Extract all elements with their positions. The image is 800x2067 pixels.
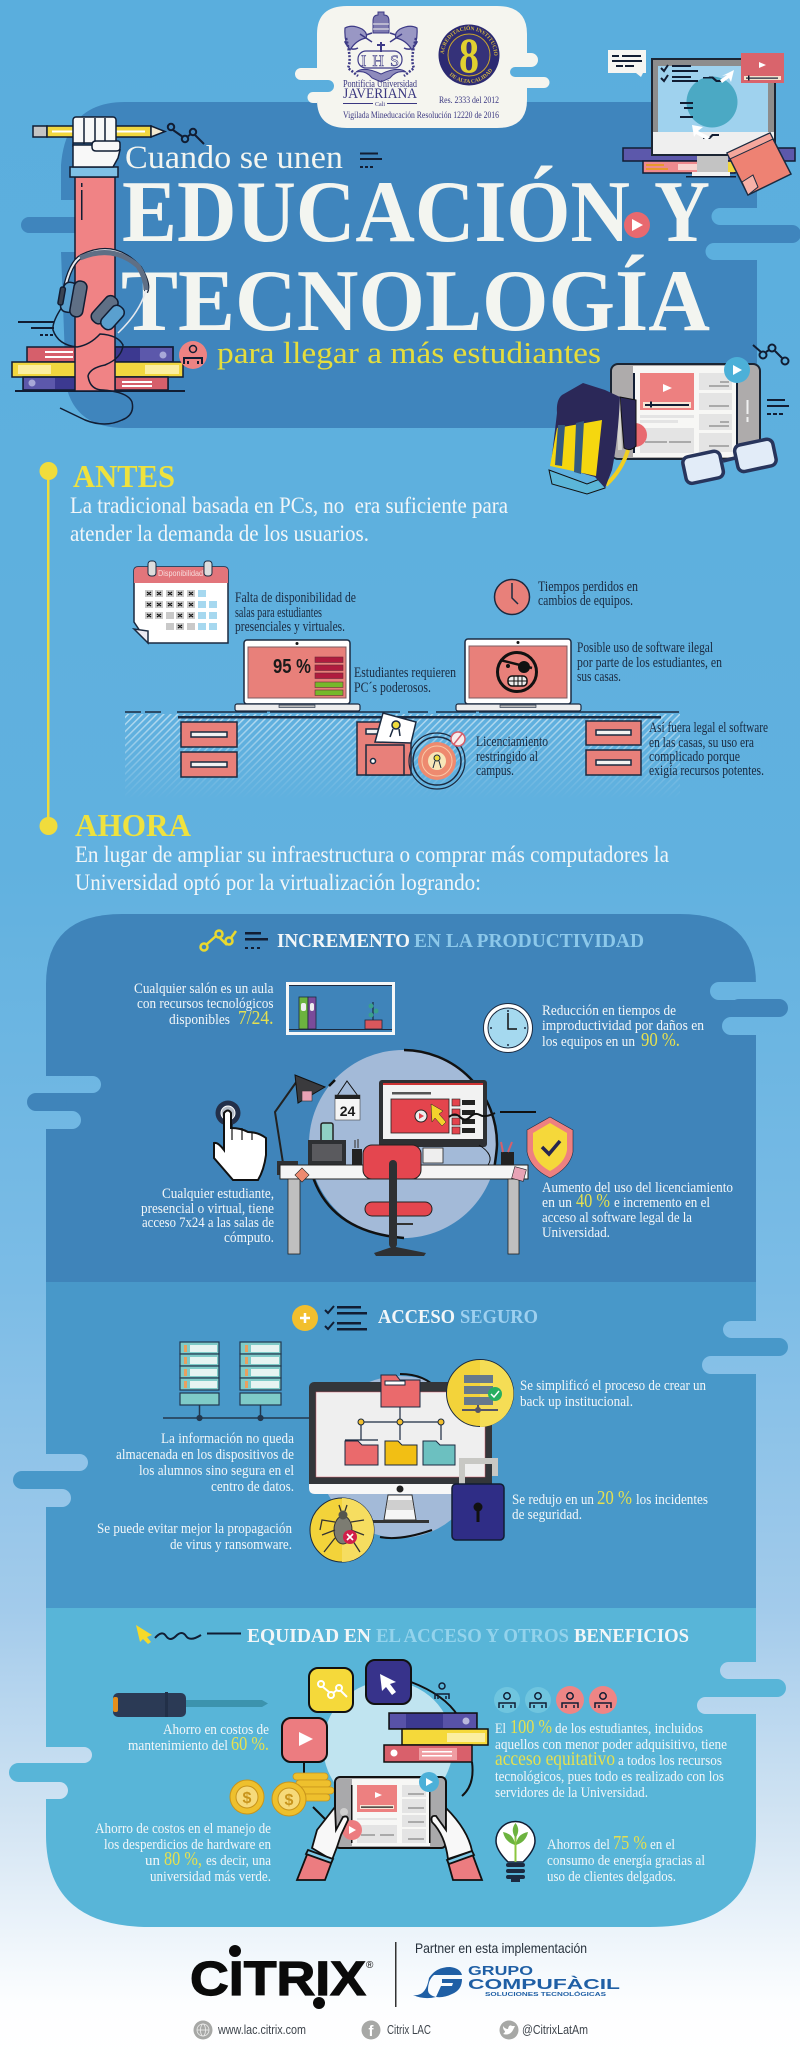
text: incidentes: de seguridad. xyxy=(512,1507,582,1523)
icon: laptop 95 percent: 95 % xyxy=(273,656,311,678)
text: 100 percent: aquellos con menor poder adquisitivo, tiene xyxy=(495,1737,727,1753)
text: ahorro desperdicios: un xyxy=(145,1853,160,1869)
icon: plus badge xyxy=(292,1305,318,1331)
person small xyxy=(435,1683,449,1699)
illustration: tablet, backpack and glasses xyxy=(549,357,777,494)
text: posible uso xyxy=(577,640,723,685)
title line: educación y: Y xyxy=(654,164,710,261)
desk objects xyxy=(321,1123,333,1142)
text: cualquier salon: disponibles xyxy=(169,1012,230,1028)
icon: graph nodes near pencil xyxy=(168,124,204,144)
text: ahorros energia: en el xyxy=(650,1837,675,1853)
heading: incremento xyxy=(200,930,644,952)
text: estudiantes requieren xyxy=(354,665,457,696)
icon: laptop 95 percent xyxy=(235,640,360,711)
heading: ahora: AHORA xyxy=(75,807,191,843)
text: tiempos perdidos: Tiempos perdidos en xyxy=(538,579,639,595)
heading: equidad: EL ACCESO Y OTROS xyxy=(376,1625,569,1647)
icon: accreditation seal xyxy=(438,24,500,86)
footer: facebook: f xyxy=(368,2023,374,2040)
icon: shelf xyxy=(288,984,394,1034)
drawers left xyxy=(181,722,237,777)
text: aumento licenciamiento: Aumento del uso del licenciamiento xyxy=(542,1180,733,1196)
text: 100 percent: de los estudiantes, incluidos xyxy=(555,1721,703,1737)
text: informacion: La información no queda xyxy=(161,1431,294,1447)
heading: acceso seguro: ACCESO xyxy=(378,1306,455,1328)
text: virus: de virus y ransomware. xyxy=(170,1537,292,1553)
icon: dashes right xyxy=(767,399,789,415)
book stack xyxy=(384,1713,488,1762)
text: ahorros energia: Ahorros del xyxy=(547,1837,610,1853)
text: ahorro desperdicios: Ahorro de costos en el manejo de xyxy=(95,1821,271,1837)
text: ahorros energia xyxy=(547,1832,705,1885)
text: ahorro mantenimiento: Ahorro en costos de xyxy=(163,1722,269,1738)
text: informacion: los alumnos sino segura en el xyxy=(139,1463,294,1479)
drawer centre with certificate xyxy=(357,713,416,775)
icon: persons row xyxy=(494,1686,617,1714)
icon: wall clock xyxy=(484,1004,532,1052)
title xyxy=(121,140,710,370)
text: informacion: almacenada en los dispositivos de xyxy=(116,1447,294,1463)
wall calendar xyxy=(337,1081,358,1096)
text: cualquier estudiante: presencial o virtual, tiene xyxy=(141,1201,274,1217)
footer: compufacil logo: GRUPO xyxy=(468,1963,533,1978)
panel: incremento background xyxy=(0,914,800,1282)
hands xyxy=(297,1807,482,1880)
video card xyxy=(741,53,784,83)
panel: acceso background xyxy=(0,1282,800,1608)
icon: bug badge xyxy=(310,1498,374,1562)
divider xyxy=(395,1942,396,2007)
text: informacion xyxy=(116,1431,294,1495)
title line: para llegar: para llegar a más estudiantes xyxy=(217,335,601,370)
text: aumento licenciamiento: en un xyxy=(542,1195,572,1211)
footer: web link xyxy=(194,2020,306,2040)
text: licenciamiento: Licenciamiento xyxy=(476,734,548,750)
text: ahorro desperdicios: 80 %, xyxy=(164,1848,202,1870)
text: incidentes xyxy=(512,1487,708,1523)
icon: university crest: IHS xyxy=(361,53,399,70)
text: ahorros energia: consumo de energía gracias al xyxy=(547,1853,705,1869)
text: virus: Se puede evitar mejor la propagación xyxy=(97,1521,292,1537)
footer: partner text: Partner en esta implementación xyxy=(415,1940,587,1956)
text: 100 percent xyxy=(495,1716,727,1801)
text: falta de disponibilidad xyxy=(235,590,356,635)
heading: equidad xyxy=(136,1625,689,1647)
illustration: monitor with folders xyxy=(309,1374,492,1538)
tile: play xyxy=(282,1718,327,1762)
text block: antes intro: La tradicional basada en PCs, no era suficiente para xyxy=(70,493,508,518)
text: ahorros energia: 75 % xyxy=(613,1832,647,1854)
drawers right xyxy=(586,721,641,775)
text: asi fuera legal: Así fuera legal el software xyxy=(649,720,768,736)
sticky note xyxy=(727,133,791,195)
timeline xyxy=(40,462,58,835)
text: cualquier estudiante: acceso 7x24 a las salas de xyxy=(142,1215,274,1231)
desk xyxy=(280,1165,528,1179)
text: posible uso: por parte de los estudiantes, en xyxy=(577,655,723,671)
university name: Cali xyxy=(375,102,385,108)
text: cualquier salon: 7/24. xyxy=(238,1007,274,1029)
text: falta de disponibilidad: salas para estudiantes xyxy=(235,605,322,621)
text: ahorro desperdicios: los desperdicios de hardware en xyxy=(104,1837,271,1853)
text: reduccion: Reducción en tiempos de xyxy=(542,1003,676,1019)
icon: calendar xyxy=(134,561,228,643)
icon: person badge xyxy=(179,341,207,369)
icon: license seal xyxy=(409,732,465,789)
text block: antes intro: atender la demanda de los usuarios. xyxy=(70,521,369,546)
text: licenciamiento xyxy=(476,734,548,779)
footer: compufacil logo: COMPUFÀCIL xyxy=(468,1976,620,1993)
text: aumento licenciamiento: 40 % xyxy=(576,1190,610,1212)
backpack xyxy=(620,397,636,450)
panel: antes scene desk xyxy=(125,712,680,799)
icon: screwdriver xyxy=(113,1692,268,1717)
text: reduccion: 90 %. xyxy=(641,1029,680,1051)
text block: ahora intro: Universidad optó por la virtualización logrando: xyxy=(75,870,481,895)
icon: chain xyxy=(200,930,236,950)
text: posible uso: Posible uso de software ilegal xyxy=(577,640,713,656)
text: falta de disponibilidad: presenciales y virtuales. xyxy=(235,619,345,635)
icon: university crest xyxy=(345,12,417,82)
icon: light bulb xyxy=(496,1822,535,1882)
text: 100 percent: servidores de la Universidad. xyxy=(495,1785,648,1801)
chair xyxy=(363,1145,421,1179)
icon: backup server badge xyxy=(446,1360,514,1427)
heading: equidad: EQUIDAD EN xyxy=(247,1625,372,1647)
text: 100 percent: a todos los recursos xyxy=(618,1753,722,1769)
text: 100 percent: 100 % xyxy=(510,1716,552,1738)
backpack strap xyxy=(606,450,628,485)
text: 100 percent: tecnológicos, pues todo es realizado con los xyxy=(495,1769,724,1785)
tile: cursor xyxy=(366,1660,411,1704)
text: ahorros energia: uso de clientes delgados. xyxy=(547,1869,676,1885)
text: licenciamiento: restringido al xyxy=(476,749,538,765)
icon: touch hand xyxy=(214,1100,266,1180)
text: posible uso: sus casas. xyxy=(577,669,621,685)
monitor checklist xyxy=(661,65,723,139)
tile: graph xyxy=(309,1668,353,1712)
illustration: desk scene: 24 xyxy=(340,1103,355,1119)
icon: graph nodes right xyxy=(753,344,788,364)
text: informacion: centro de datos. xyxy=(211,1479,294,1495)
text: estudiantes requieren: PC´s poderosos. xyxy=(354,680,431,696)
text: backup xyxy=(520,1378,706,1410)
icon: accreditation seal: DE ALTA CALIDAD xyxy=(449,68,492,83)
icon: dashes xyxy=(245,932,268,949)
title line: tecnología: TECNOLOGÍA xyxy=(121,253,710,350)
icon: coins: $ xyxy=(285,1792,294,1809)
text: ahorro desperdicios: es decir, una xyxy=(206,1853,271,1869)
text: cualquier salon: Cualquier salón es un aula xyxy=(134,981,274,997)
illustration: arm with pencil, books and headphones xyxy=(12,117,185,424)
glasses xyxy=(682,438,777,484)
icon: arrow squiggle xyxy=(136,1625,241,1644)
heading: antes: ANTES xyxy=(73,458,175,494)
icon: lock xyxy=(452,1461,504,1540)
footer: web link: www.lac.citrix.com xyxy=(217,2023,306,2037)
icon: servers xyxy=(163,1342,309,1420)
accreditation text: Res. 2333 del 2012 xyxy=(439,96,499,106)
footer: twitter: @CitrixLatAm xyxy=(522,2023,588,2037)
text: ahorro desperdicios: universidad más verde. xyxy=(150,1869,271,1885)
icon: checklist xyxy=(325,1306,367,1330)
text: asi fuera legal xyxy=(649,720,768,779)
monitor xyxy=(379,1080,487,1147)
icon: accreditation seal: 8 xyxy=(459,27,479,83)
text: cualquier salon: con recursos tecnológicos xyxy=(137,996,274,1012)
footer: citrix logo: CITRIX xyxy=(190,1953,366,2006)
heading: equidad: BENEFICIOS xyxy=(574,1625,689,1647)
text block: antes intro xyxy=(70,493,508,546)
lamp xyxy=(275,1081,297,1163)
icon: shield xyxy=(527,1117,573,1178)
icon: clock pink xyxy=(494,580,530,614)
logo plate xyxy=(295,6,550,128)
text: estudiantes requieren: Estudiantes requieren xyxy=(354,665,457,681)
text: asi fuera legal: en las casas, su uso era xyxy=(649,735,754,751)
text: ahorro desperdicios xyxy=(95,1821,271,1885)
text: reduccion xyxy=(542,1003,704,1051)
text: virus xyxy=(97,1521,292,1553)
icon: play badge xyxy=(624,212,650,238)
fist xyxy=(73,117,120,167)
text: tiempos perdidos xyxy=(538,579,639,609)
books stack xyxy=(12,347,183,390)
text: incidentes: los incidentes xyxy=(636,1492,708,1508)
title line: educación y: EDUCACIÓN xyxy=(122,164,630,261)
footer: twitter xyxy=(500,2020,588,2040)
tablet xyxy=(611,364,760,459)
text block: ahora intro: En lugar de ampliar su infraestructura o comprar más computadores la xyxy=(75,842,669,867)
footer: facebook: Citrix LAC xyxy=(387,2023,431,2037)
text: asi fuera legal: exigía recursos potentes. xyxy=(649,763,764,779)
icon: coins xyxy=(230,1780,306,1816)
text block: ahora intro xyxy=(75,842,669,895)
text: backup: back up institucional. xyxy=(520,1394,633,1410)
text: reduccion: los equipos en un xyxy=(542,1034,635,1050)
text: aumento licenciamiento: Universidad. xyxy=(542,1225,610,1241)
accreditation text xyxy=(343,96,499,121)
text: licenciamiento: campus. xyxy=(476,763,514,779)
icon: coins: $ xyxy=(243,1790,252,1807)
illustration: monitor with notes xyxy=(608,50,795,195)
panel: equidad background xyxy=(0,1608,800,1927)
university name: JAVERIANA xyxy=(343,86,417,102)
heading: acceso seguro: SEGURO xyxy=(460,1306,538,1328)
text: incidentes: Se redujo en un xyxy=(512,1492,594,1508)
speech bubble xyxy=(608,50,646,77)
arm xyxy=(75,177,115,391)
icon: calendar: Disponibilidad xyxy=(158,569,203,578)
university name: Pontificia Universidad xyxy=(343,79,417,90)
text: ahorro mantenimiento: 60 %. xyxy=(231,1733,269,1755)
text: reduccion: improductividad por daños en xyxy=(542,1018,704,1034)
text: cualquier estudiante: Cualquier estudiante, xyxy=(162,1186,274,1202)
footer: facebook xyxy=(362,2020,431,2040)
text: tiempos perdidos: cambios de equipos. xyxy=(538,593,633,609)
university name xyxy=(343,79,417,108)
text: cualquier estudiante xyxy=(141,1186,274,1246)
folders xyxy=(345,1375,455,1465)
accreditation text: Vigilada Mineducación Resolución 12220 de 2016 xyxy=(343,111,499,121)
heading: acceso seguro xyxy=(292,1305,538,1331)
icon: dashes by title xyxy=(360,152,382,168)
pencil xyxy=(33,126,165,137)
text: aumento licenciamiento xyxy=(542,1180,733,1241)
text: backup: Se simplificó el proceso de crear un xyxy=(520,1378,706,1394)
icon: laptop pirate xyxy=(456,639,581,711)
footer: citrix logo: ® xyxy=(366,1960,374,1971)
text: 100 percent: acceso equitativo xyxy=(495,1748,615,1770)
text: aumento licenciamiento: e incremento en el xyxy=(614,1195,710,1211)
footer: compufacil logo: SOLUCIONES TECNOLÓGICAS xyxy=(485,1990,606,1998)
text: ahorro mantenimiento: mantenimiento del xyxy=(128,1738,228,1754)
text: asi fuera legal: complicado porque xyxy=(649,749,740,765)
text: 100 percent: El xyxy=(495,1721,506,1737)
text: cualquier estudiante: cómputo. xyxy=(224,1230,274,1246)
text: incidentes: 20 % xyxy=(597,1487,632,1509)
illustration: desk scene xyxy=(275,1050,536,1256)
headphones xyxy=(53,250,147,424)
icon: dashes left xyxy=(18,321,54,336)
heading: incremento: EN LA PRODUCTIVIDAD xyxy=(414,930,644,952)
heading: incremento: INCREMENTO xyxy=(277,930,410,952)
illustration: tablet with app tiles xyxy=(282,1660,488,1880)
text: aumento licenciamiento: acceso al software legal de la xyxy=(542,1210,692,1226)
panel: header background xyxy=(21,102,800,428)
tablet xyxy=(335,1777,446,1848)
text: ahorro mantenimiento xyxy=(128,1722,269,1755)
text: cualquier salon xyxy=(134,981,274,1029)
text: falta de disponibilidad: Falta de disponibilidad de xyxy=(235,590,356,606)
footer: compufacil logo xyxy=(413,1963,620,1998)
title line: cuando se unen: Cuando se unen xyxy=(125,140,343,176)
coin stack xyxy=(293,1773,334,1801)
